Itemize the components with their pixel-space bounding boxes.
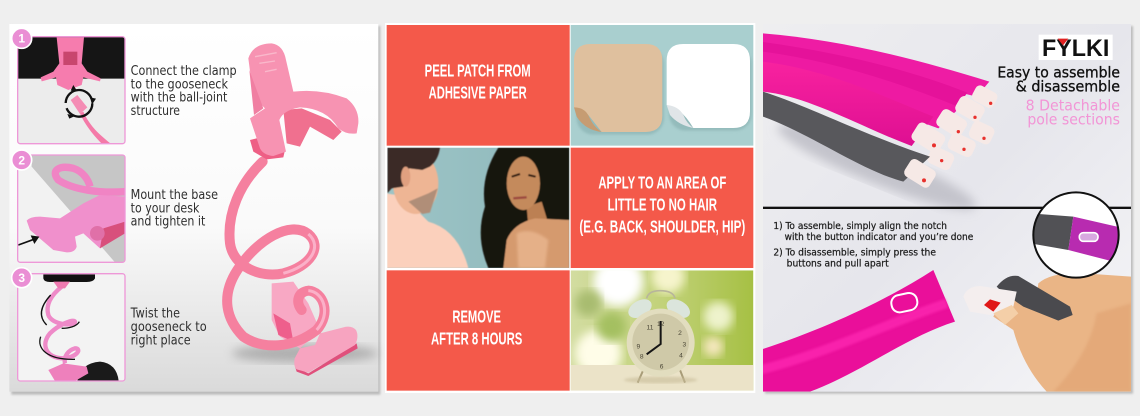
image: alarm clock: 11: [647, 324, 654, 331]
step 1 image: [18, 37, 125, 144]
tube bundle: [763, 33, 999, 190]
step: remove: REMOVE: [452, 307, 501, 327]
instructions text: 1) To assemble, simply align the notch: [773, 221, 947, 232]
instructions text: buttons and pull apart: [787, 259, 889, 270]
image: man and woman: [385, 148, 569, 268]
step 1 text: with the ball-joint: [131, 91, 227, 106]
step 2 text: Mount the base: [131, 188, 218, 203]
shadow under bundle: [776, 123, 977, 212]
step 2 image: [18, 155, 125, 262]
heading: Easy to assemble: [997, 63, 1120, 81]
step: apply to area: APPLY TO AN AREA OF: [598, 173, 726, 193]
step: apply to area: (E.G. BACK, SHOULDER, HIP): [579, 216, 745, 236]
image: alarm clock: 3: [682, 342, 686, 349]
badge 1: 1: [18, 32, 25, 46]
step: peel patch: ADHESIVE PAPER: [429, 82, 527, 102]
image: alarm clock: 2: [678, 330, 682, 337]
badge 2: 2: [18, 153, 25, 167]
badge 3: 3: [18, 271, 25, 285]
image: alarm clock: 4: [679, 352, 683, 359]
panel: hula hoop assembly: [760, 24, 1133, 394]
step: apply to area: LITTLE TO NO HAIR: [608, 195, 717, 215]
zoom circle: [1030, 192, 1120, 278]
step 3 text: gooseneck to: [131, 320, 207, 335]
step 2 text: and tighten it: [131, 215, 205, 230]
logo: FYLKI: [1042, 35, 1109, 62]
image: alarm clock: [571, 257, 753, 391]
panel: phone holder instructions: [9, 24, 380, 395]
step 1 text: structure: [131, 104, 180, 119]
badge 3: [12, 268, 32, 288]
step 3 text: right place: [131, 333, 191, 348]
badge 2: [12, 150, 32, 170]
image: alarm clock: 8: [640, 353, 644, 360]
panel: patch instructions: [385, 23, 755, 393]
hand holding grey section: [963, 273, 1131, 392]
subheading: 8 Detachable: [1026, 97, 1120, 115]
step: remove: AFTER 8 HOURS: [431, 329, 522, 349]
step 2 text: to your desk: [131, 202, 200, 217]
phone holder illustration: [227, 43, 378, 376]
step: peel patch: PEEL PATCH FROM: [425, 60, 531, 80]
instructions text: with the button indicator and you’re done: [785, 232, 973, 243]
step: apply to area: [571, 148, 753, 268]
step 1 text: to the gooseneck: [131, 77, 228, 92]
step 1 text: Connect the clamp: [131, 64, 237, 79]
heading: & disassemble: [1016, 78, 1120, 96]
image: alarm clock: 9: [636, 343, 640, 350]
subheading: pole sections: [1027, 111, 1120, 129]
image: alarm clock: 12: [657, 321, 665, 328]
step 3 text: Twist the: [130, 306, 180, 321]
step: peel patch: [387, 25, 570, 146]
image: patches: [571, 25, 753, 146]
step: remove: [387, 270, 570, 391]
instructions text: 2) To disassemble, simply press the: [773, 248, 936, 259]
pink tube close-up: [760, 270, 955, 392]
step 3 image: [18, 274, 125, 381]
badge 1: [12, 28, 32, 48]
divider line: [763, 207, 1131, 209]
image: alarm clock: 6: [660, 364, 664, 371]
